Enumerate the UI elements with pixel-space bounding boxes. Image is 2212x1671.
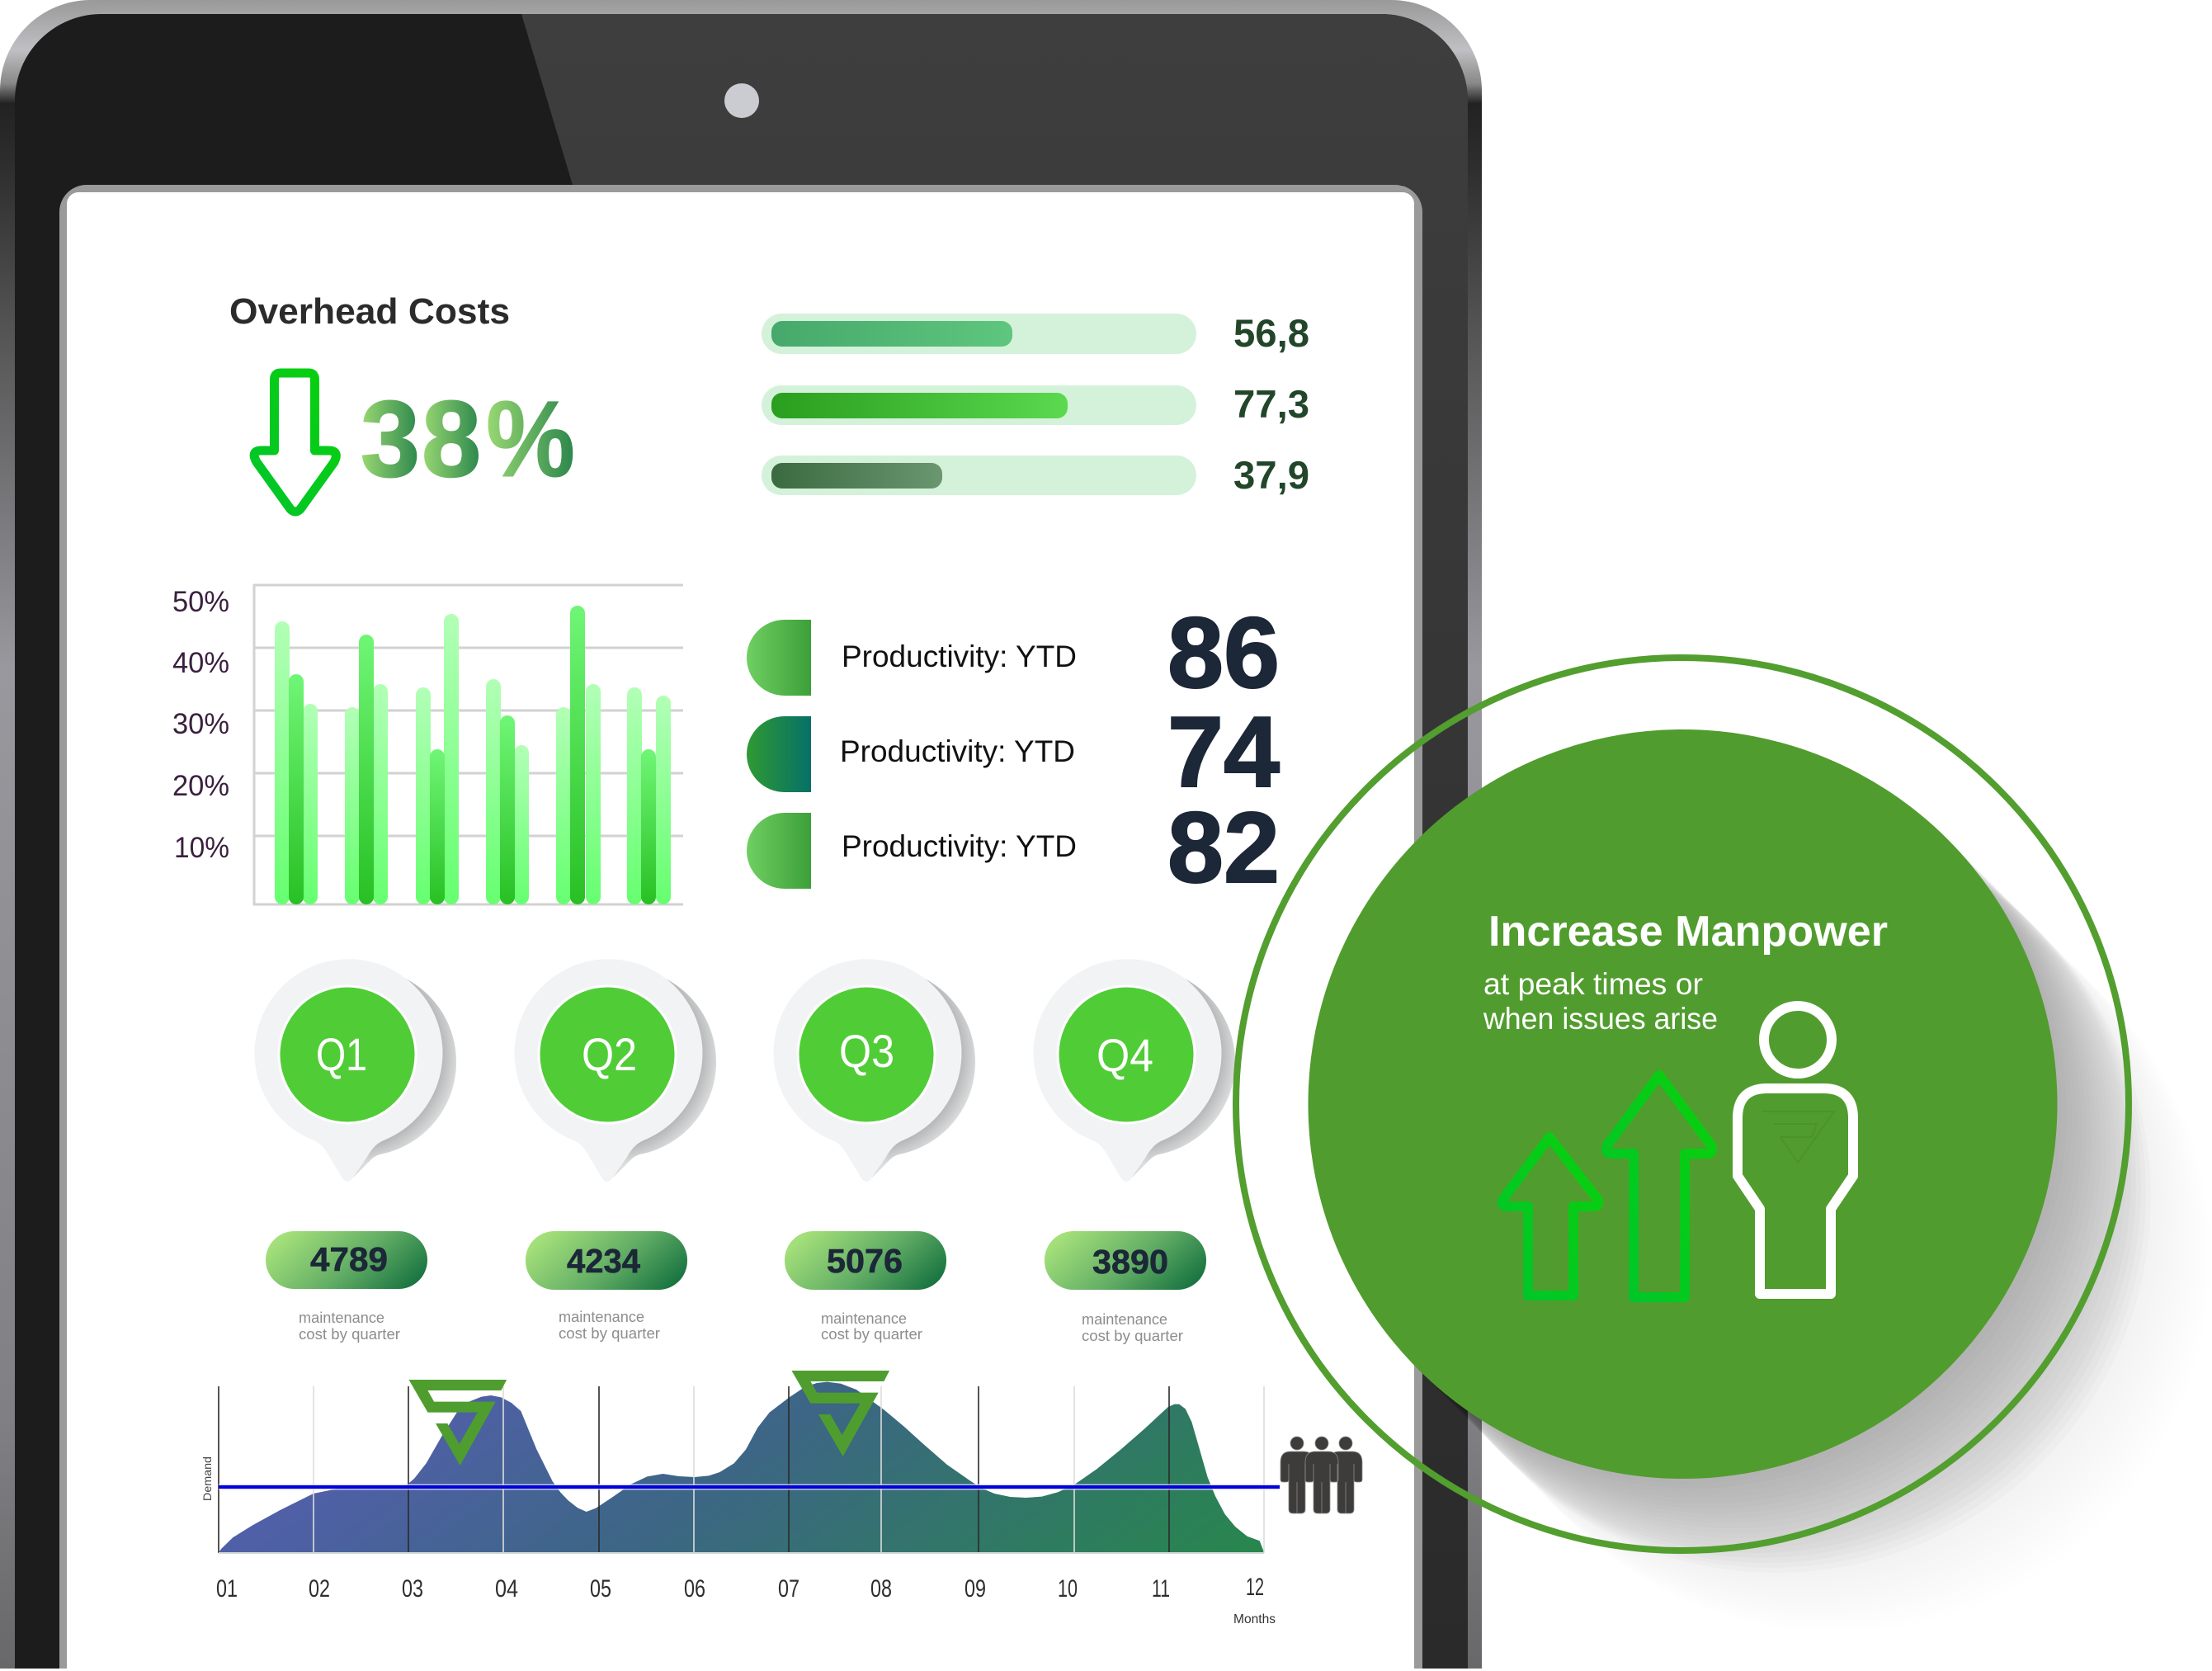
callout heading: Increase Manpower: [1488, 908, 1888, 956]
bar chart: [172, 584, 683, 905]
callout subtext: [1483, 967, 1718, 1036]
productivity row 74: Productivity: YTD: [840, 734, 1075, 768]
icon: large up arrow: [1606, 1075, 1712, 1297]
month labels: 10: [1058, 1575, 1078, 1603]
big percentage 38%: %: [486, 378, 575, 499]
y axis labels: 20%: [172, 770, 229, 802]
tablet device: [0, 0, 1482, 1669]
value pill 3890: [1045, 1231, 1206, 1290]
month labels: 06: [684, 1575, 705, 1603]
heading: overhead costs: Overhead Costs: [229, 291, 510, 332]
bars light: [275, 614, 671, 904]
y axis labels: 10%: [174, 832, 229, 864]
caption Q3: maintenance: [821, 1310, 907, 1327]
icon: person: [1738, 1006, 1853, 1294]
pin Q4: [1033, 959, 1235, 1182]
progress bar 37,9: [762, 453, 1309, 497]
outer ring: [1236, 658, 2129, 1551]
panel: quarter Q2: [515, 959, 716, 1342]
screen frame: [59, 185, 1422, 1669]
value pill 4789: 4789: [310, 1240, 388, 1278]
month labels: 02: [309, 1575, 330, 1603]
pin Q2: [515, 959, 716, 1182]
pin Q1: [254, 959, 456, 1182]
productivity row 82: Productivity: YTD: [842, 829, 1077, 863]
pin Q2: Q2: [582, 1028, 637, 1080]
value pill 4789: [266, 1231, 427, 1289]
logo marker 1: [409, 1380, 507, 1466]
pin Q3: [774, 959, 975, 1182]
month labels: 12: [1246, 1574, 1264, 1601]
month labels: 03: [402, 1575, 423, 1603]
month labels: 01: [216, 1575, 238, 1603]
progress bar 56,8: 56,8: [1233, 311, 1309, 355]
demand area chart: [200, 1371, 1362, 1626]
y axis labels: 30%: [172, 708, 229, 740]
panel: quarter Q1: [254, 959, 456, 1343]
big percentage 38%: [361, 378, 575, 499]
value pill 5076: [785, 1231, 946, 1290]
caption Q1: [299, 1309, 400, 1343]
pin Q4: Q4: [1097, 1029, 1153, 1081]
productivity row 82: [747, 791, 1280, 904]
bezel glare: [521, 14, 1468, 1669]
callout subtext: when issues arise: [1483, 1002, 1718, 1036]
icon: small up arrow: [1502, 1137, 1598, 1296]
long drop shadow: [1313, 734, 2210, 1632]
month labels: 04: [495, 1575, 518, 1603]
value pill 3890: 3890: [1092, 1243, 1168, 1281]
panel: quarter Q4: [1033, 959, 1235, 1344]
caption Q1: maintenance: [299, 1309, 384, 1326]
y axis labels: 40%: [172, 647, 229, 679]
y axis labels: [172, 586, 229, 864]
tablet black bezel: [15, 14, 1468, 1669]
caption Q4: cost by quarter: [1082, 1327, 1183, 1344]
month labels: 05: [590, 1575, 611, 1603]
big percentage 38%: 8: [422, 378, 481, 499]
progress bar 77,3: 77,3: [1233, 382, 1309, 426]
value pill 4234: [526, 1231, 687, 1290]
logo marker 2: [791, 1371, 889, 1456]
months axis label: Months: [1233, 1612, 1276, 1626]
value pill 5076: 5076: [827, 1242, 903, 1280]
chart grid: [253, 584, 683, 905]
panel: progress bars: [762, 311, 1309, 497]
demand axis label: Demand: [200, 1456, 214, 1501]
productivity row 86: [747, 597, 1280, 709]
callout: increase manpower: [1236, 658, 2210, 1632]
progress bar 37,9: 37,9: [1233, 453, 1309, 497]
icon: down arrow: [254, 373, 336, 512]
caption Q4: maintenance: [1082, 1310, 1167, 1328]
month labels: 07: [778, 1575, 799, 1603]
demand area: [219, 1382, 1264, 1553]
threshold line: [219, 1484, 1280, 1490]
productivity row 74: 74: [1167, 696, 1280, 808]
pin Q3: Q3: [839, 1025, 894, 1077]
caption Q2: [559, 1308, 660, 1342]
panel: productivity list: [747, 597, 1280, 904]
bars dark: [289, 606, 656, 904]
screen: [67, 192, 1414, 1669]
month labels: [216, 1574, 1264, 1603]
caption Q2: maintenance: [559, 1308, 644, 1325]
month labels: 11: [1152, 1575, 1170, 1603]
month grid lines: [219, 1386, 1264, 1553]
caption Q2: cost by quarter: [559, 1324, 660, 1342]
progress bar 56,8: [762, 311, 1309, 355]
caption Q4: [1082, 1310, 1183, 1344]
month labels: 08: [870, 1575, 892, 1603]
productivity row 86: 86: [1167, 597, 1280, 709]
productivity row 86: Productivity: YTD: [842, 640, 1077, 673]
productivity row 82: 82: [1167, 791, 1280, 904]
progress bar 77,3: [762, 382, 1309, 426]
value pill 4234: 4234: [567, 1242, 640, 1280]
productivity row 74: [747, 696, 1280, 808]
caption Q3: cost by quarter: [821, 1325, 922, 1343]
baseline: [219, 1552, 1264, 1554]
green disc: [1309, 729, 2058, 1479]
callout subtext: at peak times or: [1483, 967, 1703, 1001]
month labels: 09: [965, 1575, 986, 1603]
tablet outer frame: [0, 0, 1482, 1669]
icon: three people: [1281, 1437, 1362, 1513]
pin Q1: Q1: [316, 1028, 367, 1080]
camera: [724, 83, 759, 118]
panel: quarter Q3: [774, 959, 975, 1343]
panel: overhead costs: [229, 291, 575, 512]
y axis labels: 50%: [172, 586, 229, 618]
big percentage 38%: 3: [361, 378, 420, 499]
caption Q3: [821, 1310, 922, 1343]
caption Q1: cost by quarter: [299, 1325, 400, 1343]
